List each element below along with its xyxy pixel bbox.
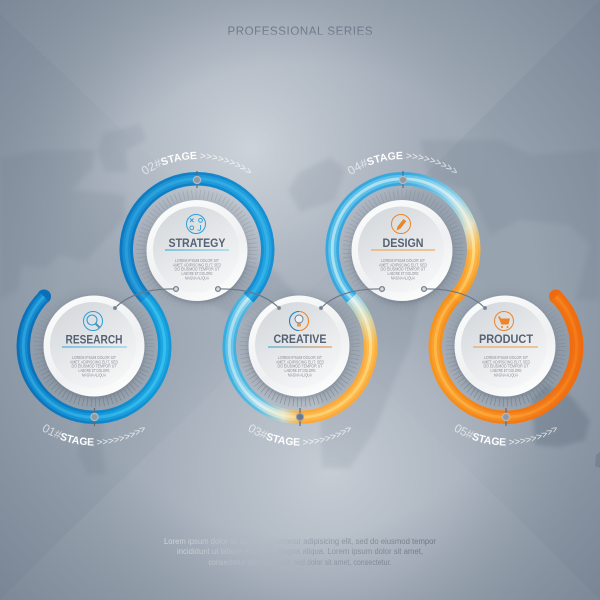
strategy body text: AMET, ADIPISCING ELIT, SED [173, 262, 221, 267]
footer text block: incididunt ut labore et dolore magna aliqua. Lorem ipsum dolor sit amet, [177, 546, 423, 556]
icon: pencil [392, 214, 410, 234]
panel: creative [248, 296, 350, 396]
footer text block: consectetur adipiscing elit, sed dolor sit amet, consectetur. [208, 557, 392, 567]
creative body text: DO EIUSMOD TEMPOR UT [278, 364, 323, 369]
design disc [352, 200, 452, 301]
ribbon: research segment [23, 290, 165, 417]
strategy body text: MAGNA ALIQUA [185, 275, 209, 280]
research disc [44, 296, 144, 396]
ribbon: product segment [435, 290, 577, 417]
design body text: AMET, ADIPISCING ELIT, SED [379, 262, 427, 267]
design body text: LABORE ET DOLORE [388, 271, 419, 276]
product body text: AMET, ADIPISCING ELIT, SED [482, 359, 530, 364]
design rule [371, 250, 435, 251]
research body text: DO EIUSMOD TEMPOR UT [72, 364, 117, 369]
design heading: DESIGN [382, 238, 424, 250]
stage label 01: 01#STAGE >>>>>>>>> [42, 424, 145, 446]
ribbon: design segment [332, 179, 474, 298]
creative body text: LOREM IPSUM DOLOR SIT [278, 355, 322, 360]
icon: tactics board [186, 214, 206, 234]
strategy body text [173, 258, 221, 280]
product body text [482, 355, 530, 377]
creative body text: AMET, ADIPISCING ELIT, SED [276, 359, 324, 364]
panel: research [44, 296, 144, 396]
stage label 03: 03#STAGE >>>>>>>>> [248, 424, 351, 446]
design body text [379, 258, 427, 280]
panel: product [454, 296, 556, 396]
stage label 04: 04#STAGE >>>>>>>>> [348, 152, 457, 174]
product body text: MAGNA ALIQUA [494, 372, 518, 377]
panel: strategy [146, 200, 248, 301]
strategy body text: LOREM IPSUM DOLOR SIT [175, 258, 219, 263]
design body text: MAGNA ALIQUA [391, 275, 415, 280]
ribbon: strategy segment [126, 179, 268, 298]
product body text: DO EIUSMOD TEMPOR UT [484, 364, 529, 369]
strategy body text: DO EIUSMOD TEMPOR UT [174, 267, 220, 272]
strategy disc [146, 200, 248, 301]
strategy rule [165, 250, 229, 251]
icon: light bulb [290, 312, 309, 330]
product disc [454, 296, 556, 396]
creative body text: LABORE ET DOLORE [284, 368, 316, 373]
creative disc [248, 296, 350, 396]
product heading: PRODUCT [479, 334, 533, 346]
research rule [62, 346, 127, 348]
product body text: LOREM IPSUM DOLOR SIT [484, 355, 528, 360]
continuous ribbon path through all five stages [23, 179, 577, 417]
icon: magnifier [84, 312, 102, 330]
research body text: LOREM IPSUM DOLOR SIT [72, 355, 116, 360]
strategy heading: STRATEGY [168, 238, 226, 250]
creative rule [268, 346, 332, 348]
panel: design [352, 200, 452, 301]
tick halos behind the discs [36, 192, 564, 406]
title: PROFESSIONAL SERIES [228, 26, 373, 38]
research body text: AMET, ADIPISCING ELIT, SED [70, 359, 118, 364]
icon: shopping cart [494, 312, 514, 330]
footer text block: Lorem ipsum dolor sit amet, consectetur adipisicing elit, sed do eiusmod tempor [164, 536, 436, 546]
stage label 02: 02#STAGE >>>>>>>>> [142, 152, 251, 174]
ribbon markers [91, 171, 510, 426]
research heading: RESEARCH [66, 334, 122, 346]
ribbon: creative segment [229, 298, 371, 417]
creative body text [276, 355, 324, 377]
research body text: MAGNA ALIQUA [82, 372, 106, 377]
research body text: LABORE ET DOLORE [78, 368, 110, 373]
research body text [70, 355, 118, 377]
design body text: LOREM IPSUM DOLOR SIT [381, 258, 425, 263]
design body text: DO EIUSMOD TEMPOR UT [380, 267, 426, 272]
creative body text: MAGNA ALIQUA [288, 372, 312, 377]
product rule [473, 346, 538, 348]
creative heading: CREATIVE [274, 334, 327, 346]
connectors between stages [113, 287, 487, 310]
strategy body text: LABORE ET DOLORE [182, 271, 213, 276]
product body text: LABORE ET DOLORE [490, 368, 522, 373]
footer text block [164, 536, 436, 567]
stage label 05: 05#STAGE >>>>>>>>> [454, 424, 557, 446]
